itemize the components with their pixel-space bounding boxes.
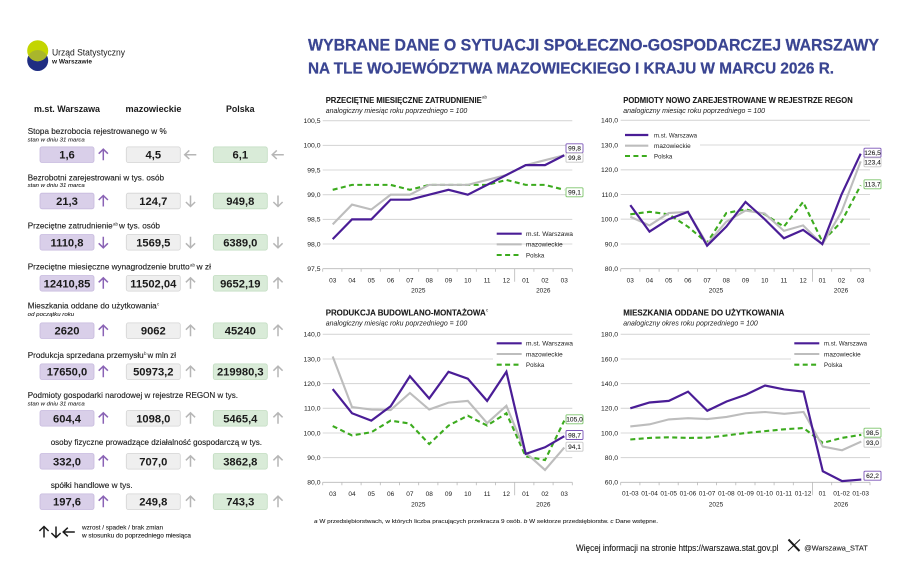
indicator: mieszkania oddane	[28, 301, 283, 338]
value tags	[864, 428, 881, 480]
line chart: przeciętne miesięczne zatrudnienie: 03	[561, 277, 568, 284]
indicator: przeciętne zatrudnienie	[28, 221, 283, 250]
table column headings	[34, 104, 255, 114]
indicator: przeciętne zatrudnienie: 6389,0	[223, 237, 257, 249]
indicator: bezrobotni zarejestrowani	[28, 172, 283, 209]
legend	[497, 231, 573, 259]
line chart: mieszkania oddane do użytkowania: 01-08	[718, 491, 735, 498]
indicator: produkcja sprzedana przemysłu: b	[144, 351, 147, 356]
line chart: produkcja budowlano-montażowa: 12	[503, 491, 510, 498]
legend: mazowieckie	[654, 143, 691, 150]
chart subtitle: analogiczny miesiąc roku poprzedniego = 100	[623, 106, 766, 115]
line chart: przeciętne miesięczne zatrudnienie: 02	[541, 277, 549, 284]
table column headings: m.st. Warszawa	[34, 104, 101, 114]
indicator: mieszkania oddane: od początku roku	[28, 312, 75, 318]
line chart: przeciętne miesięczne zatrudnienie: ab	[482, 94, 488, 100]
line chart: podmioty nowo zarejestrowane: 07	[703, 277, 711, 284]
value tags: 62,2	[866, 473, 879, 480]
indicator: spółki handlowe: 743,3	[226, 497, 254, 509]
line chart: podmioty nowo zarejestrowane: 08	[723, 277, 730, 284]
social handle: @Warszawa_STAT	[804, 544, 868, 552]
indicator: mieszkania oddane: 9062	[141, 326, 166, 338]
line chart: produkcja budowlano-montażowa: 08	[426, 491, 433, 498]
table column headings: mazowieckie	[126, 104, 182, 114]
line chart: mieszkania oddane do użytkowania: 01-02	[833, 491, 850, 498]
indicator: mieszkania oddane: 45240	[225, 326, 256, 338]
line chart: przeciętne miesięczne zatrudnienie: 100,5	[303, 118, 321, 125]
line chart: podmioty nowo zarejestrowane: 09	[742, 277, 749, 284]
legend	[794, 341, 867, 369]
main title: NA TLE WOJEWÓDZTWA MAZOWIECKIEGO I KRAJU W MARCU 2026 R.	[308, 58, 834, 78]
line chart: mieszkania oddane do użytkowania: 180,0	[601, 332, 618, 339]
line chart: mieszkania oddane do użytkowania: 60,0	[605, 480, 618, 487]
icon: X logo	[788, 540, 800, 551]
line chart: mieszkania oddane do użytkowania: 01-12	[795, 491, 812, 498]
line chart: produkcja budowlano-montażowa: 120,0	[303, 381, 321, 388]
indicator: podmioty gospodarki narodowej: 5465,4	[223, 413, 258, 425]
indicator: przeciętne wynagrodzenie: ab	[190, 262, 196, 268]
line chart: przeciętne miesięczne zatrudnienie: 03	[329, 277, 337, 284]
indicator: przeciętne zatrudnienie: 1569,5	[136, 237, 170, 249]
line chart: produkcja budowlano-montażowa: 07	[406, 491, 414, 498]
line chart: produkcja budowlano-montażowa: 05	[368, 491, 375, 498]
line chart: podmioty nowo zarejestrowane: 2025	[709, 287, 724, 294]
legend: mazowieckie	[526, 242, 563, 249]
logo: Urząd Statystyczny w Warszawie: Urząd Statystyczny	[52, 47, 125, 58]
indicator: produkcja sprzedana przemysłu: 219980,3	[217, 367, 264, 379]
line chart: podmioty nowo zarejestrowane: 03	[857, 277, 865, 284]
legend	[625, 132, 697, 160]
indicator: mieszkania oddane: Mieszkania oddane do użytkowania	[28, 301, 157, 311]
indicator: osoby fizyczne: 332,0	[53, 456, 81, 468]
line chart: produkcja budowlano-montażowa: 09	[445, 491, 452, 498]
legend: mazowieckie	[526, 351, 563, 358]
line chart: podmioty nowo zarejestrowane: 120,0	[601, 167, 618, 174]
line chart: mieszkania oddane do użytkowania: 01-09	[737, 491, 754, 498]
line chart: produkcja budowlano-montażowa: 02	[541, 491, 549, 498]
chart subtitle: analogiczny okres roku poprzedniego = 100	[623, 319, 759, 328]
line chart: produkcja budowlano-montażowa: 110,0	[304, 406, 321, 413]
line chart: podmioty nowo zarejestrowane: 100,0	[601, 216, 618, 224]
line chart: mieszkania oddane do użytkowania: 01-05	[660, 491, 677, 498]
legend: mazowieckie	[824, 351, 861, 358]
main title	[308, 35, 880, 78]
value tags: 113,7	[864, 182, 881, 189]
line chart: podmioty nowo zarejestrowane: 01	[819, 277, 826, 284]
indicator: podmioty gospodarki narodowej: stan w dniu 31 marca	[28, 401, 85, 407]
arrows legend: wzrost / spadek / brak zmian	[81, 525, 164, 532]
indicator: stopa bezrobocia: 4,5	[146, 150, 161, 162]
logo: Urząd Statystyczny w Warszawie	[27, 40, 125, 71]
line chart: przeciętne miesięczne zatrudnienie: 06	[387, 277, 395, 284]
line chart: mieszkania oddane do użytkowania: 01-06	[680, 491, 697, 498]
line chart: podmioty nowo zarejestrowane: 90,0	[605, 241, 618, 248]
indicator: produkcja sprzedana przemysłu	[28, 350, 283, 380]
line chart: przeciętne miesięczne zatrudnienie: 100,0	[303, 143, 321, 150]
value tags: 98,5	[866, 430, 879, 437]
line chart: podmioty nowo zarejestrowane: 02	[838, 277, 845, 284]
table column headings: Polska	[226, 104, 255, 114]
value tags: 105,0	[566, 417, 583, 424]
line chart: produkcja budowlano-montażowa	[303, 308, 583, 508]
legend: m.st. Warszawa	[526, 341, 573, 348]
indicator: przeciętne wynagrodzenie: 9652,19	[220, 278, 261, 290]
line chart: podmioty nowo zarejestrowane: 10	[761, 277, 769, 284]
line chart: produkcja budowlano-montażowa: 130,0	[303, 356, 321, 363]
line chart: podmioty nowo zarejestrowane: 04	[646, 277, 653, 284]
legend: Polska	[526, 252, 544, 259]
more information line: Więcej informacji na stronie https://warszawa.stat.gov.pl	[576, 543, 778, 553]
indicator: stopa bezrobocia: 1,6	[59, 150, 75, 162]
line chart: podmioty nowo zarejestrowane: 12	[799, 277, 807, 284]
line chart: mieszkania oddane do użytkowania: 01-10	[756, 491, 773, 498]
indicator: stopa bezrobocia: Stopa bezrobocia rejestrowanego w %	[28, 126, 167, 136]
line chart: mieszkania oddane do użytkowania: 01	[819, 491, 826, 498]
indicator: podmioty gospodarki narodowej: 604,4	[53, 413, 82, 425]
line chart: produkcja budowlano-montażowa: 01	[522, 491, 530, 498]
indicator: produkcja sprzedana przemysłu: 17650,0	[47, 367, 87, 379]
indicator: bezrobotni zarejestrowani: 124,7	[139, 196, 167, 208]
indicator: przeciętne wynagrodzenie: Przeciętne miesięczne wynagrodzenie brutto	[28, 262, 190, 272]
line chart: mieszkania oddane do użytkowania: 01-11	[776, 491, 792, 498]
line chart: przeciętne miesięczne zatrudnienie: 09	[445, 277, 452, 284]
indicator: spółki handlowe: spółki handlowe w tys.	[51, 480, 133, 490]
line chart: produkcja budowlano-montażowa: 2026	[536, 501, 551, 508]
arrows legend	[39, 525, 192, 540]
line chart: mieszkania oddane do użytkowania	[601, 308, 881, 508]
indicator: osoby fizyczne	[40, 437, 283, 469]
indicator: podmioty gospodarki narodowej: Podmioty gospodarki narodowej w rejestrze REGON w tys.	[28, 390, 238, 400]
indicator: przeciętne zatrudnienie: w tys. osób	[118, 221, 160, 231]
indicator: osoby fizyczne: 707,0	[139, 456, 167, 468]
indicator: bezrobotni zarejestrowani: 21,3	[56, 196, 78, 208]
indicator: podmioty gospodarki narodowej	[28, 390, 283, 426]
indicator: spółki handlowe: 197,6	[53, 497, 81, 509]
line chart: przeciętne miesięczne zatrudnienie: 08	[426, 277, 433, 284]
indicator: stopa bezrobocia: stan w dniu 31 marca	[28, 138, 85, 144]
indicator: osoby fizyczne: 3862,8	[223, 456, 257, 468]
chart title: PRODUKCJA BUDOWLANO-MONTAŻOWA	[326, 308, 486, 318]
line chart: przeciętne miesięczne zatrudnienie: 98,5	[307, 217, 321, 224]
line chart: mieszkania oddane do użytkowania: 100,0	[601, 430, 618, 437]
arrows legend: w stosunku do poprzedniego miesiąca	[81, 533, 192, 540]
line chart: przeciętne miesięczne zatrudnienie: 2026	[536, 287, 551, 294]
line chart: podmioty nowo zarejestrowane: 06	[684, 277, 692, 284]
indicator: mieszkania oddane: c	[157, 302, 160, 306]
value tags: 99,8	[568, 155, 581, 162]
indicator: produkcja sprzedana przemysłu: 50973,2	[133, 367, 174, 379]
line chart: podmioty nowo zarejestrowane: 110,0	[601, 192, 618, 199]
line chart: przeciętne miesięczne zatrudnienie: 01	[522, 277, 530, 284]
line chart: przeciętne miesięczne zatrudnienie: 99,0	[307, 192, 321, 199]
line chart: mieszkania oddane do użytkowania: 01-03	[852, 491, 869, 498]
indicator: spółki handlowe: 249,8	[139, 497, 167, 509]
indicator: produkcja sprzedana przemysłu: w mln zł	[147, 350, 176, 360]
line chart: przeciętne miesięczne zatrudnienie: 99,5	[307, 167, 321, 174]
line chart: produkcja budowlano-montażowa: 2025	[411, 501, 426, 508]
line chart: podmioty nowo zarejestrowane: 130,0	[601, 142, 618, 149]
legend: Polska	[824, 362, 842, 369]
indicator: przeciętne wynagrodzenie: 11502,04	[130, 278, 177, 290]
value tags: 94,1	[568, 444, 581, 451]
line chart: przeciętne miesięczne zatrudnienie: 11	[484, 277, 491, 284]
line chart: produkcja budowlano-montażowa: 06	[387, 491, 395, 498]
chart subtitle: analogiczny miesiąc roku poprzedniego = 100	[326, 106, 468, 115]
logo: Urząd Statystyczny w Warszawie: w Warszawie	[51, 58, 92, 66]
line chart: produkcja budowlano-montażowa: 90,0	[307, 455, 321, 462]
value tags	[864, 148, 881, 189]
indicator: bezrobotni zarejestrowani: 949,8	[226, 196, 254, 208]
value tags	[566, 144, 583, 197]
line chart: przeciętne miesięczne zatrudnienie: 07	[406, 277, 414, 284]
line chart: produkcja budowlano-montażowa: 03	[329, 491, 337, 498]
line chart: podmioty nowo zarejestrowane: 140,0	[601, 118, 618, 125]
legend	[497, 341, 573, 369]
line chart: podmioty nowo zarejestrowane	[601, 95, 881, 294]
value tags: 123,4	[864, 160, 881, 167]
indicator: przeciętne wynagrodzenie	[28, 262, 283, 291]
line chart: mieszkania oddane do użytkowania: 01-03	[622, 491, 639, 498]
chart subtitle: analogiczny miesiąc roku poprzedniego = 100	[326, 319, 468, 328]
indicator: bezrobotni zarejestrowani: stan w dniu 31 marca	[28, 183, 85, 189]
line chart: podmioty nowo zarejestrowane: 80,0	[605, 266, 618, 273]
value tags: 126,5	[864, 150, 881, 157]
indicator: przeciętne zatrudnienie: ab	[113, 222, 119, 226]
indicator: stopa bezrobocia	[28, 126, 284, 162]
line chart: produkcja budowlano-montażowa: 140,0	[303, 332, 321, 339]
indicator: produkcja sprzedana przemysłu: Produkcja sprzedana przemysłu	[28, 350, 144, 360]
indicator: przeciętne zatrudnienie: 1110,8	[51, 237, 83, 249]
indicator: mieszkania oddane: 2620	[55, 326, 79, 338]
footnotes: a W przedsiębiorstwach, w których liczba pracujących przekracza 9 osób. b W sektorze przedsiębiorstw. c Dane wstępne.	[314, 519, 658, 525]
line chart: produkcja budowlano-montażowa: 80,0	[307, 480, 321, 487]
line chart: podmioty nowo zarejestrowane: 03	[627, 277, 634, 284]
line chart: mieszkania oddane do użytkowania: 120,0	[601, 406, 618, 413]
line chart: produkcja budowlano-montażowa: 10	[464, 491, 472, 498]
line chart: mieszkania oddane do użytkowania: 80,0	[605, 455, 618, 462]
indicator: przeciętne wynagrodzenie: w zł	[196, 262, 211, 272]
line chart: mieszkania oddane do użytkowania: 160,0	[601, 356, 618, 363]
line chart: przeciętne miesięczne zatrudnienie: 12	[503, 277, 510, 284]
line chart: przeciętne miesięczne zatrudnienie: 2025	[411, 287, 426, 294]
line chart: przeciętne miesięczne zatrudnienie: 10	[464, 277, 472, 284]
chart title: MIESZKANIA ODDANE DO UŻYTKOWANIA	[623, 308, 784, 318]
indicator: osoby fizyczne: osoby fizyczne prowadzące działalność gospodarczą w tys.	[51, 437, 262, 447]
line chart: produkcja budowlano-montażowa: 04	[348, 491, 356, 498]
indicator: podmioty gospodarki narodowej: 1098,0	[136, 413, 170, 425]
line chart: przeciętne miesięczne zatrudnienie	[303, 94, 583, 294]
value tags	[566, 415, 583, 451]
line chart: mieszkania oddane do użytkowania: 2026	[834, 501, 849, 508]
value tags: 99,1	[568, 190, 581, 197]
legend: Polska	[654, 153, 672, 160]
line chart: przeciętne miesięczne zatrudnienie: 97,5	[307, 266, 321, 273]
line chart: produkcja budowlano-montażowa: c	[486, 308, 489, 312]
value tags: 99,8	[568, 146, 581, 153]
legend: m.st. Warszawa	[654, 132, 697, 139]
indicator: bezrobotni zarejestrowani: Bezrobotni zarejestrowani w tys. osób	[28, 172, 164, 182]
legend: Polska	[526, 362, 544, 369]
indicator: przeciętne zatrudnienie: Przeciętne zatrudnienie	[28, 221, 113, 231]
line chart: mieszkania oddane do użytkowania: 01-07	[699, 491, 716, 498]
chart title: PRZECIĘTNE MIESIĘCZNE ZATRUDNIENIE	[326, 95, 482, 105]
indicator: spółki handlowe	[40, 480, 283, 510]
line chart: podmioty nowo zarejestrowane: 11	[781, 277, 788, 284]
line chart: mieszkania oddane do użytkowania: 01-04	[641, 491, 658, 498]
line chart: podmioty nowo zarejestrowane: 2026	[834, 287, 849, 294]
chart title: PODMIOTY NOWO ZAREJESTROWANE W REJESTRZE REGON	[623, 95, 853, 105]
line chart: mieszkania oddane do użytkowania: 140,0	[601, 381, 618, 388]
indicator: stopa bezrobocia: 6,1	[233, 150, 248, 162]
line chart: produkcja budowlano-montażowa: 03	[561, 491, 568, 498]
line chart: przeciętne miesięczne zatrudnienie: 05	[368, 277, 375, 284]
value tags: 93,0	[866, 440, 879, 447]
line chart: mieszkania oddane do użytkowania: 2025	[709, 501, 724, 508]
legend: m.st. Warszawa	[526, 231, 573, 238]
line chart: przeciętne miesięczne zatrudnienie: 98,0	[307, 241, 321, 248]
line chart: podmioty nowo zarejestrowane: 05	[665, 277, 673, 284]
indicator: przeciętne wynagrodzenie: 12410,85	[44, 278, 90, 290]
value tags: 98,7	[568, 432, 581, 439]
line chart: produkcja budowlano-montażowa: 11	[484, 491, 491, 498]
legend: m.st. Warszawa	[824, 341, 867, 348]
line chart: produkcja budowlano-montażowa: 100,0	[303, 430, 321, 437]
line chart: przeciętne miesięczne zatrudnienie: 04	[348, 277, 356, 284]
